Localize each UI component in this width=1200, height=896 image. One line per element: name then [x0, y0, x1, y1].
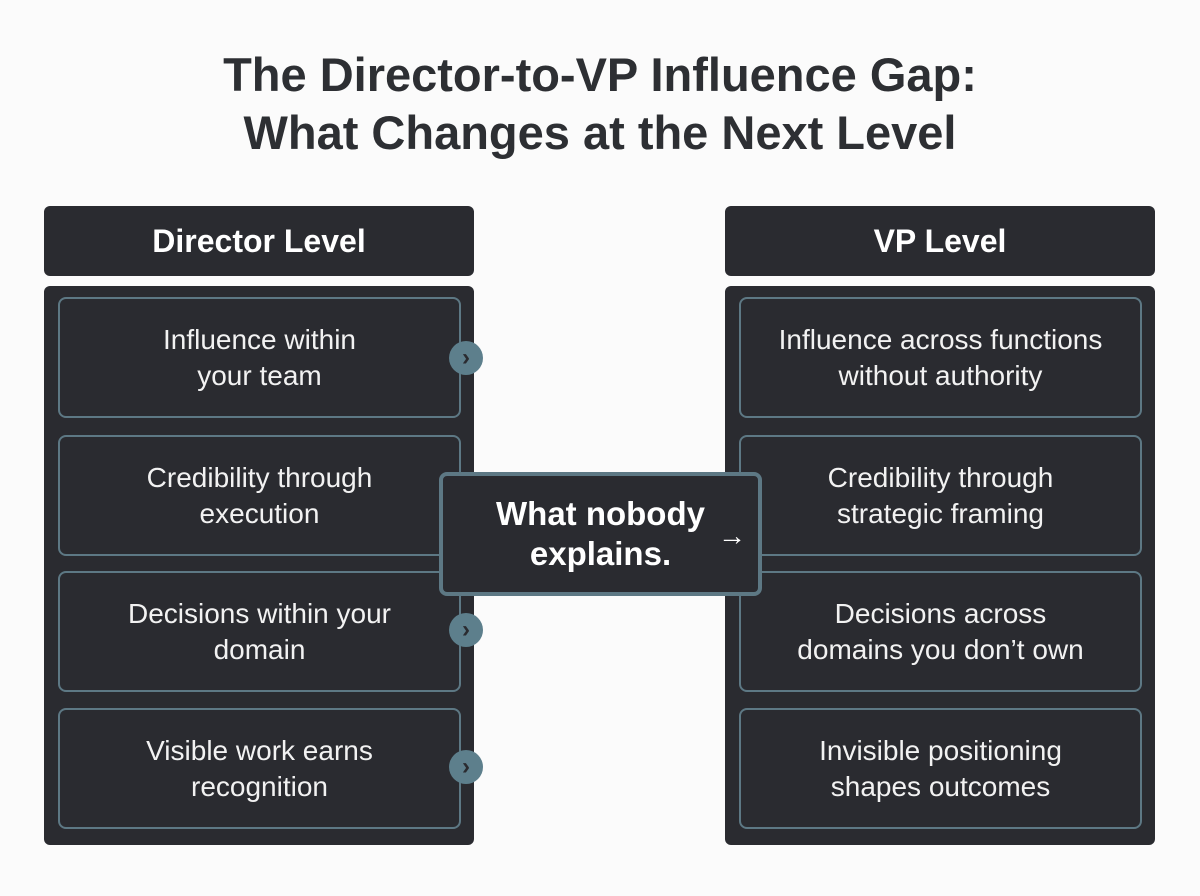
icon: chevron 1: [449, 341, 483, 375]
card: visibility: [58, 708, 461, 829]
card: positioning vp: Invisible positioning: [819, 734, 1062, 766]
card: influence vp: without authority: [839, 360, 1042, 390]
title: [223, 48, 977, 159]
card: decisions: domain: [214, 634, 305, 664]
card: decisions vp: [739, 571, 1142, 692]
icon: chevron 1: ›: [462, 344, 470, 371]
card: influence: Influence within: [163, 324, 356, 354]
icon: chevron 2: ›: [462, 616, 470, 643]
icon: chevron 3: [449, 750, 483, 784]
card: positioning vp: [739, 708, 1142, 829]
title: The Director-to-VP Influence Gap:: [223, 48, 977, 101]
card: decisions: Decisions within your: [128, 598, 391, 628]
header: director level: Director Level: [152, 222, 366, 258]
icon: chevron 3: ›: [462, 753, 470, 780]
card: visibility: Visible work earns: [146, 734, 373, 766]
header: director level: [44, 206, 474, 276]
card: influence vp: Influence across functions: [779, 324, 1102, 354]
card: positioning vp: shapes outcomes: [831, 770, 1050, 802]
title: What Changes at the Next Level: [244, 106, 956, 159]
icon: chevron 2: [449, 613, 483, 647]
card: credibility: [58, 435, 461, 556]
panel: vp level: [725, 286, 1155, 845]
header: vp level: [725, 206, 1155, 276]
callout: what nobody explains: What nobody: [496, 495, 705, 532]
card: decisions vp: Decisions across: [835, 598, 1046, 628]
callout: what nobody explains: →: [718, 520, 746, 551]
panel: director level: [44, 286, 474, 845]
card: visibility: recognition: [191, 770, 328, 802]
card: influence vp: [739, 297, 1142, 418]
card: credibility vp: [739, 435, 1142, 556]
callout: what nobody explains: [439, 472, 762, 596]
card: decisions: [58, 571, 461, 692]
callout: what nobody explains: explains.: [530, 535, 671, 572]
card: influence: [58, 297, 461, 418]
header: vp level: VP Level: [874, 222, 1006, 258]
card: credibility: execution: [200, 498, 319, 528]
card: credibility vp: Credibility through: [828, 462, 1053, 492]
card: decisions vp: domains you don’t own: [797, 634, 1084, 664]
card: credibility: Credibility through: [147, 462, 372, 492]
card: influence: your team: [197, 360, 322, 390]
card: credibility vp: strategic framing: [837, 498, 1044, 528]
